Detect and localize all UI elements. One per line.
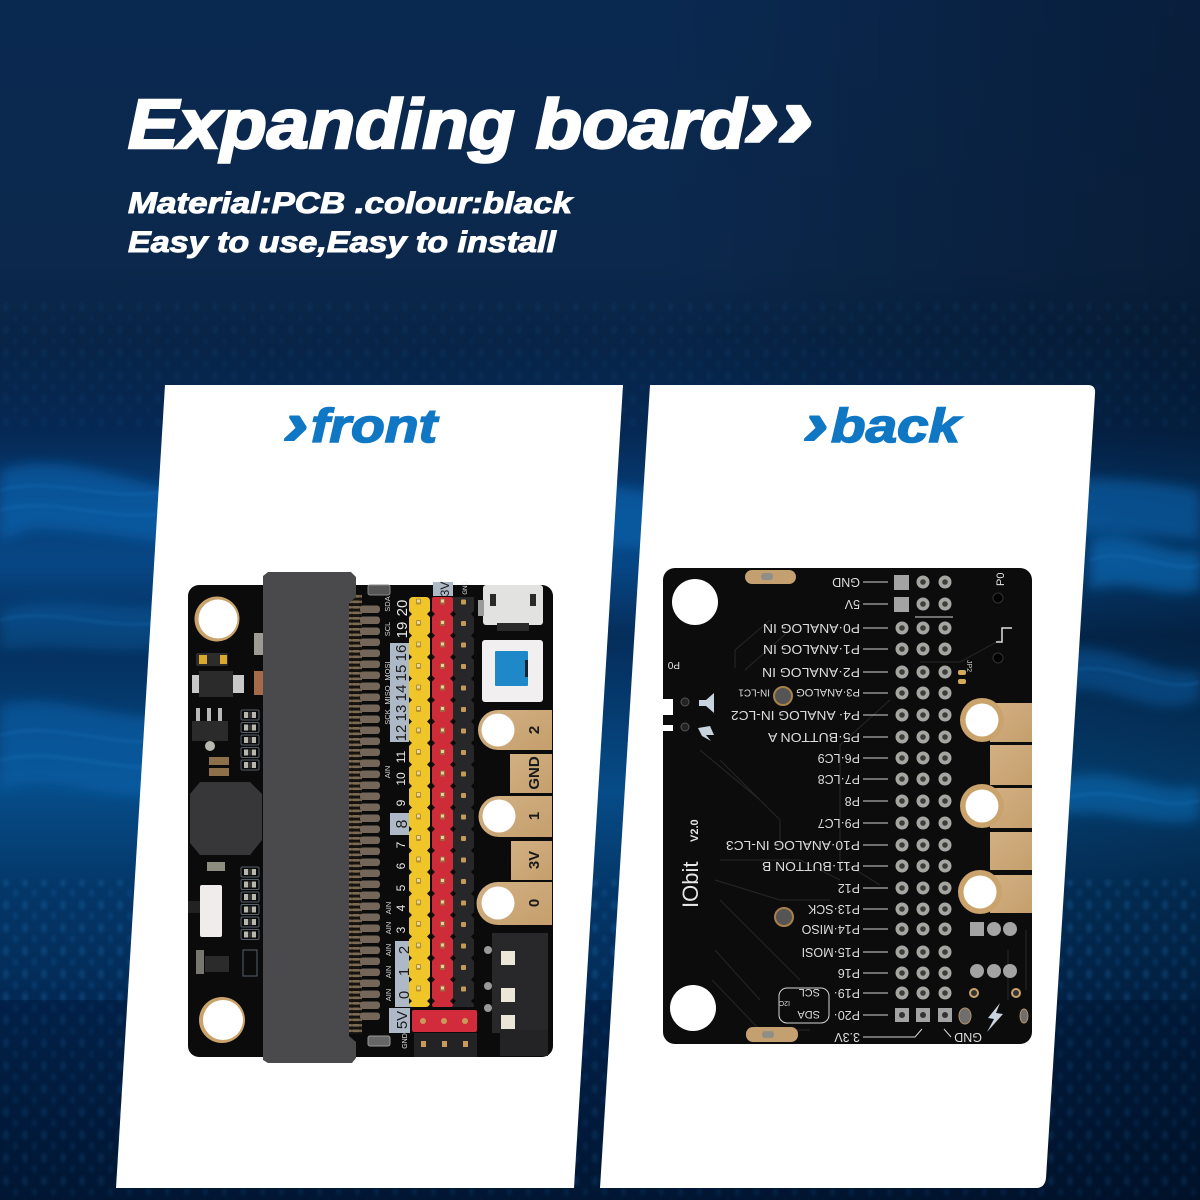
gold pad 2: 2 [526,726,543,734]
gold pad 0 [476,882,552,925]
title: Expanding board [128,85,747,163]
board name IObit V2.0: P0 [667,659,680,670]
status LEDs [368,585,390,1046]
pin numbers: 20 [394,600,411,616]
pin numbers: 3 [394,926,408,933]
pin numbers: 16 [393,645,410,661]
title: ›› [745,67,813,166]
heading: front: › [284,390,308,457]
small vias [681,593,1003,926]
pin function labels: SCK [383,709,392,725]
pin numbers: 11 [394,750,408,763]
board name IObit V2.0: IObit [678,862,703,908]
subtitle text block: Easy to use,Easy to install [128,226,557,259]
top and bottom gold tabs [745,570,798,1042]
star icon [698,726,714,741]
speaker icon [699,693,714,713]
grey silkscreen highlights [389,582,453,1033]
edge connector pads [360,604,380,1022]
pin numbers: 8 [394,819,411,828]
pin function labels: MISO [383,685,392,705]
bottom black pin row [414,1033,477,1057]
mirrored pin labels: P1·ANALOG IN [763,642,860,656]
mirrored pin labels: P12 [838,881,860,895]
pin numbers: 19 [394,622,411,638]
gold pad GND [510,754,552,793]
mirrored pin labels: 5V [844,597,860,611]
subtitle text block [128,187,574,259]
gold pad GND: GND [526,756,543,790]
pin function labels: SCL [383,622,392,636]
heading: back: › [804,390,828,457]
heading: front [284,390,440,457]
pin function labels: SDA [383,596,392,612]
pin function labels: AIN [384,944,393,956]
mirrored pin labels [726,575,982,1044]
mirrored pin labels: P5·BUTTON A [767,730,860,744]
gold pad 3V: 3V [526,851,543,869]
mirrored pin labels: P10·ANALOG IN-LC3 [726,838,860,852]
edge connector teeth [349,594,362,1034]
subtitle text block: Material:PCB .colour:black [128,187,574,220]
mirrored pin labels: P9·LC7 [818,816,860,830]
mirrored pin labels: P0·ANALOG IN [763,621,860,635]
mirrored pin labels: IN-LC1 [738,686,770,698]
mirrored pin labels: GND [954,1030,982,1044]
through-hole rows [894,575,952,1022]
pin function labels: AIN [383,766,392,778]
black pin header [453,597,474,1007]
mirrored pin labels: P13·SCK [807,902,860,916]
pin function labels [383,596,393,1001]
pin function labels: AIN [384,989,393,1001]
pin numbers: 13 [393,705,410,721]
pin numbers: 9 [394,799,408,806]
red pin header [432,597,453,1007]
pin numbers: 0 [396,991,413,999]
mirrored pin labels: P15·MOSI [802,945,860,959]
pin numbers: 15 [393,665,410,681]
board notch [663,699,673,731]
mirrored pin labels: I2C [779,999,790,1006]
gold pad 1 [478,796,552,837]
small vias: JP2 [965,660,972,672]
panel: front [116,385,623,1188]
board name IObit V2.0: P0 [995,573,1007,586]
mirrored pin labels: P19· [834,986,860,1000]
mirrored pin labels: GND [832,575,860,589]
pin numbers: 3V [438,582,452,596]
pin numbers [393,581,469,1049]
lower right pads [959,922,1028,1024]
corner mounting holes [670,579,718,1031]
bottom red pin row [412,1010,477,1032]
pin numbers: 7 [394,841,408,848]
gold pad 1: 1 [526,812,543,820]
panel: back [600,385,1095,1188]
mirrored pin labels: P20· [834,1008,860,1022]
pin function labels: MOSI [383,661,392,681]
gold edge pads [990,703,1032,913]
mirrored pin labels: P16 [838,966,860,980]
pin numbers: 10 [394,772,408,786]
mirrored pin labels: P8 [845,794,860,808]
mirrored pin labels: P7·LC8 [818,772,860,786]
pin numbers: 12 [393,725,410,741]
pin numbers: 4 [394,904,408,911]
mirrored pin labels: P11·BUTTON B [762,859,860,873]
micro USB socket [478,585,543,631]
back circuit board [663,568,1032,1044]
black edge connector slot [263,572,356,1063]
gold pad 3V [511,841,552,880]
title [128,67,813,166]
mirrored pin labels: P3·ANALOG [796,686,860,698]
board name IObit V2.0: V2.0 [689,819,701,842]
mounting holes [194,596,245,1043]
pin numbers: 5V [394,1011,411,1029]
pin leader lines [863,582,953,1037]
pin numbers: 5 [394,884,408,891]
mirrored pin labels: SCL [799,986,820,998]
heading: front: front [311,399,440,452]
mirrored pin labels: P4· ANALOG IN-LC2 [731,708,860,722]
pin function labels: AIN [384,966,393,978]
gold pad 0: 0 [526,899,543,907]
gold pad 2 [478,710,552,750]
heading: back [804,390,963,457]
circuit traces [700,620,1026,1030]
board name IObit V2.0 [667,573,1007,908]
yellow pin header [409,597,430,1007]
mirrored pin labels: P2·ANALOG IN [762,665,860,679]
pin numbers: 14 [393,685,410,701]
heading: back: back [831,399,963,452]
mirrored pin labels: P6·LC9 [818,751,860,765]
front circuit board [188,572,553,1063]
white reset button [482,640,543,702]
mirrored pin labels: P14·MISO [801,922,860,936]
signal wave icon [996,628,1012,642]
audio jack [484,933,548,1056]
pin numbers: GND [402,1033,409,1049]
mirrored pin labels: 3.3V [834,1030,860,1044]
pin numbers: 2 [396,946,413,954]
left side components [188,633,263,976]
I2C label box [779,988,829,1023]
lightning icon [987,1003,1003,1032]
gold ring holes [958,698,1004,914]
pin numbers: 6 [394,862,408,869]
pin function labels: AIN [384,902,393,914]
pin numbers: 1 [396,968,413,976]
mirrored pin labels: SDA [797,1008,820,1020]
pin numbers: GND [463,581,469,595]
pin function labels: AIN [384,922,393,934]
